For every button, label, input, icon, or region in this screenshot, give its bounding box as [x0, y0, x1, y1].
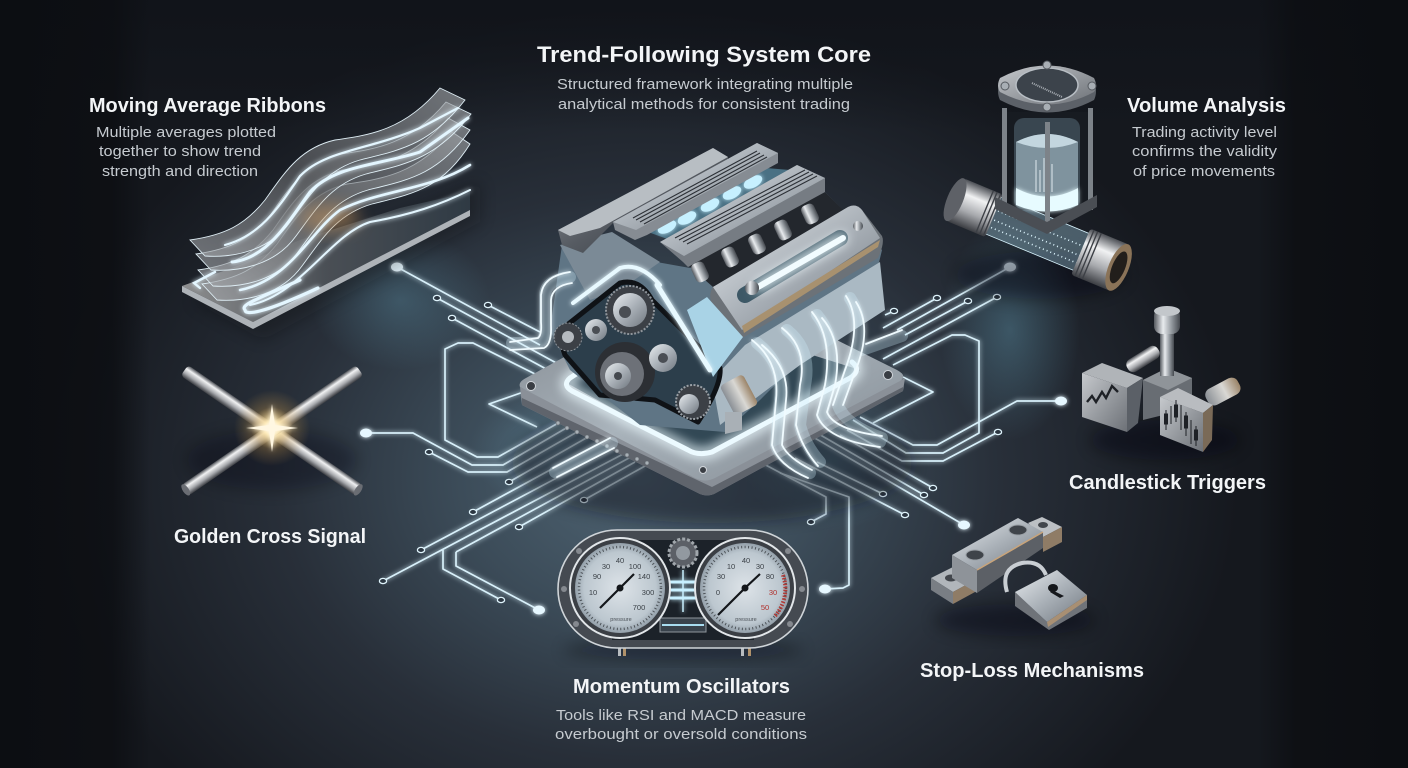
left gauge: 100 [629, 562, 641, 571]
left gauge: pressure [610, 617, 632, 623]
left gauge: 300 [642, 588, 654, 597]
text block: moving average ribbons: Multiple averages plotted [96, 124, 276, 141]
glass pipes [510, 272, 902, 478]
glass column [1002, 112, 1093, 210]
left gauge [570, 538, 670, 638]
icon: volume flow gauge [938, 61, 1137, 299]
left gauge: 10 [589, 588, 597, 597]
right gauge: 30 [769, 588, 777, 597]
heading: trend-following system core: Structured framework integrating multiple [557, 76, 853, 93]
icon: engine core on base plate [510, 143, 912, 523]
lower flange [995, 195, 1097, 234]
icon: momentum gauges [558, 530, 808, 660]
text block: momentum oscillators: Momentum Oscillators [573, 676, 790, 698]
left gauge: 90 [593, 572, 601, 581]
timing belt [557, 282, 720, 422]
right gauge: 30 [717, 572, 725, 581]
text block: volume analysis: Volume Analysis [1127, 95, 1286, 117]
text block: momentum oscillators: Tools like RSI and MACD measure [556, 707, 806, 724]
text block: moving average ribbons: strength and direction [102, 163, 258, 180]
text block: momentum oscillators: overbought or oversold conditions [555, 726, 807, 743]
heading: trend-following system core [537, 42, 871, 113]
left gauge: 140 [638, 572, 650, 581]
text block: moving average ribbons: Moving Average Ribbons [89, 95, 326, 117]
right gauge: 80 [766, 572, 774, 581]
right gauge [695, 538, 795, 638]
right gauge: 0 [716, 588, 720, 597]
right gauge: 10 [727, 562, 735, 571]
glowing upper tube [573, 267, 660, 303]
pulleys [554, 286, 710, 419]
icon: stop-loss lock [931, 517, 1095, 636]
horizontal glass tube [938, 173, 1137, 294]
circuit nodes [360, 262, 1067, 614]
right gauge: pressure [735, 617, 757, 623]
icon: candlestick stamps [1082, 306, 1243, 460]
glowing intake lights [648, 168, 790, 240]
label: golden cross signal: Golden Cross Signal [174, 526, 366, 548]
text block: momentum oscillators [555, 676, 807, 743]
text block: moving average ribbons: together to show trend [99, 143, 261, 160]
valve cover back [558, 148, 728, 253]
icon: golden cross [180, 365, 364, 497]
right gauge: 50 [761, 603, 769, 612]
connector pins [556, 421, 649, 465]
label: candlestick triggers: Candlestick Triggers [1069, 472, 1266, 494]
icon: moving average ribbons [182, 88, 480, 340]
text block: volume analysis: Trading activity level [1132, 124, 1277, 141]
heading: trend-following system core: analytical methods for consistent trading [558, 96, 850, 113]
cylinder row [688, 192, 845, 287]
base plate [512, 282, 912, 523]
heading: trend-following system core: Trend-Following System Core [537, 42, 871, 67]
left gauge: 40 [616, 556, 624, 565]
neon plate ring [566, 362, 857, 454]
left gauge: 700 [633, 603, 645, 612]
right gauge: 30 [756, 562, 764, 571]
top flange [998, 68, 1096, 112]
valve cover left [613, 143, 778, 240]
text block: volume analysis: of price movements [1133, 163, 1275, 180]
text block: moving average ribbons [89, 95, 326, 180]
valve cover centre [660, 165, 825, 267]
text block: volume analysis [1127, 95, 1286, 180]
right gauge: 40 [742, 556, 750, 565]
circuit traces [366, 267, 1061, 610]
label: stop-loss mechanisms: Stop-Loss Mechanisms [920, 660, 1144, 682]
valve cover right with neon tube [710, 206, 883, 338]
engine block [550, 192, 882, 432]
text block: volume analysis: confirms the validity [1132, 143, 1278, 160]
left gauge: 30 [602, 562, 610, 571]
